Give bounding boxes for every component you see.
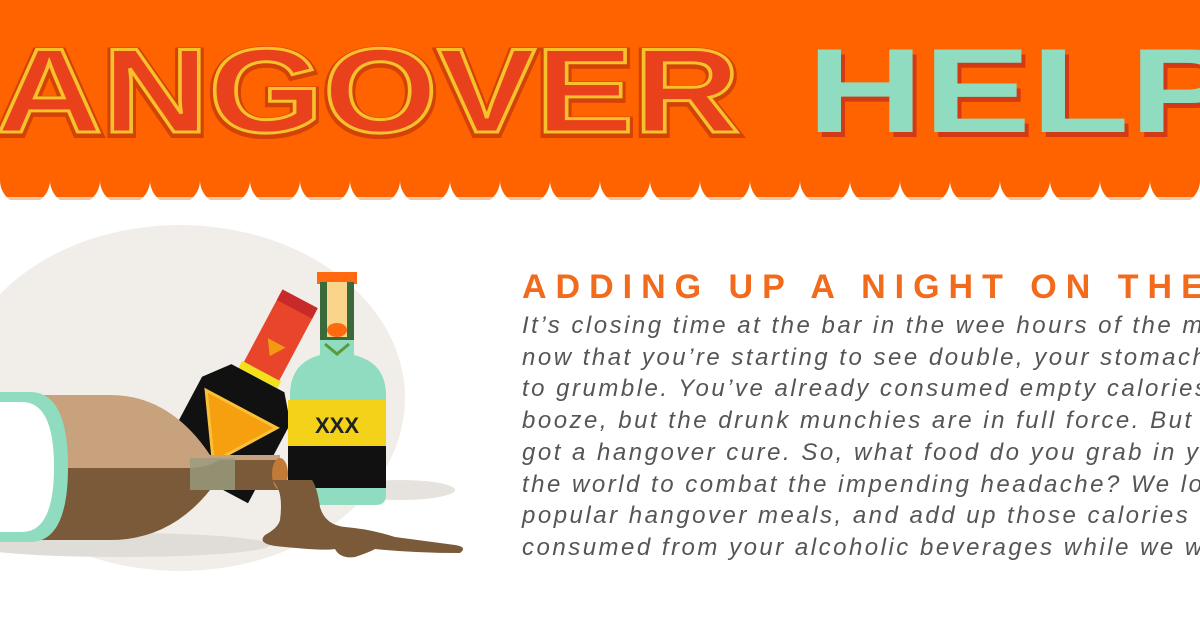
black bottle	[160, 275, 344, 503]
lying brown bottle	[0, 392, 288, 542]
spill puddle	[262, 480, 463, 557]
title: HELP: HELP	[807, 24, 1200, 158]
background ellipse	[0, 225, 405, 571]
body text	[521, 312, 1200, 561]
mint bottle: XXX	[315, 413, 359, 438]
mint bottle	[288, 272, 386, 505]
shadows	[0, 533, 270, 557]
header banner	[0, 0, 1200, 200]
illustration: spilled bottles	[0, 225, 463, 571]
title: HELP: HELP	[811, 29, 1200, 163]
